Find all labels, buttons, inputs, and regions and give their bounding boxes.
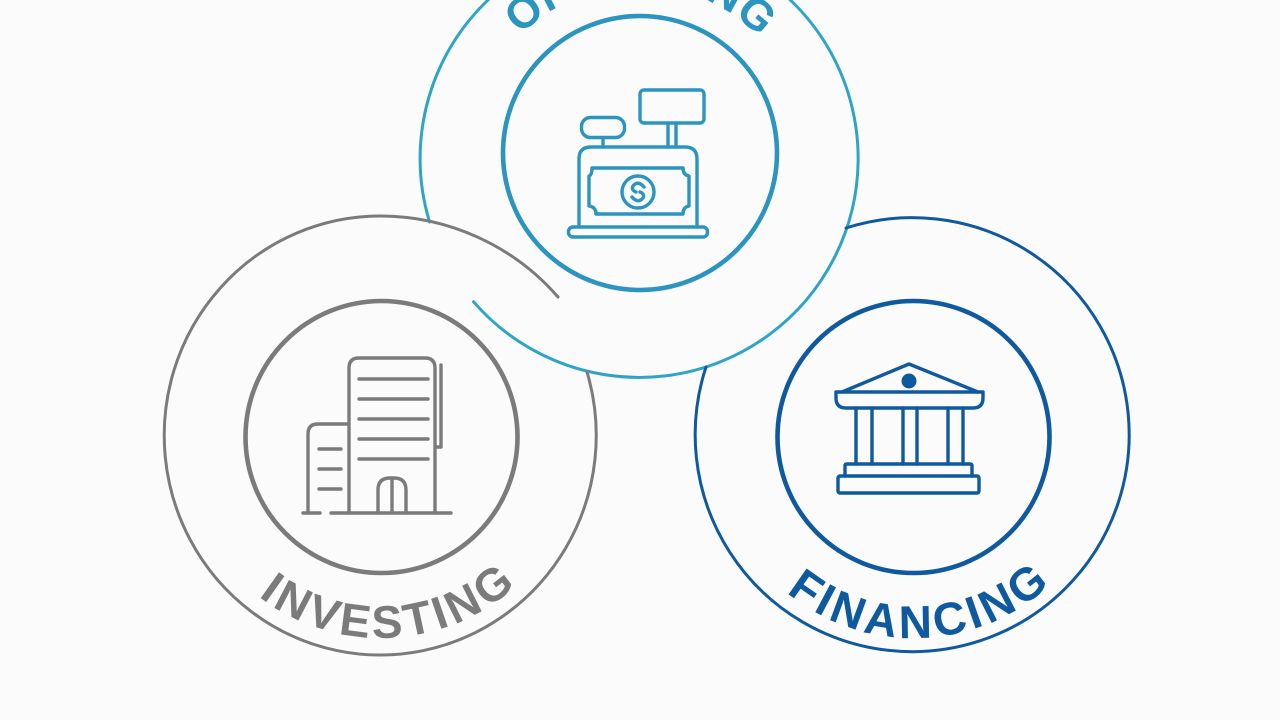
operating outer ring — [420, 0, 858, 377]
investing label: INVESTING — [260, 568, 512, 638]
financing label: FINANCING — [788, 567, 1045, 638]
financing outer ring — [695, 218, 1129, 652]
financing inner ring — [778, 301, 1050, 573]
icon: cash register — [568, 90, 708, 237]
icon: office buildings — [303, 358, 451, 513]
investing inner ring — [246, 301, 518, 573]
operating inner ring — [503, 16, 777, 290]
investing outer ring — [164, 216, 596, 655]
panel: investing — [162, 214, 598, 656]
icon: bank — [836, 364, 983, 493]
panel: financing — [694, 216, 1131, 654]
panel: operating — [418, 0, 860, 379]
